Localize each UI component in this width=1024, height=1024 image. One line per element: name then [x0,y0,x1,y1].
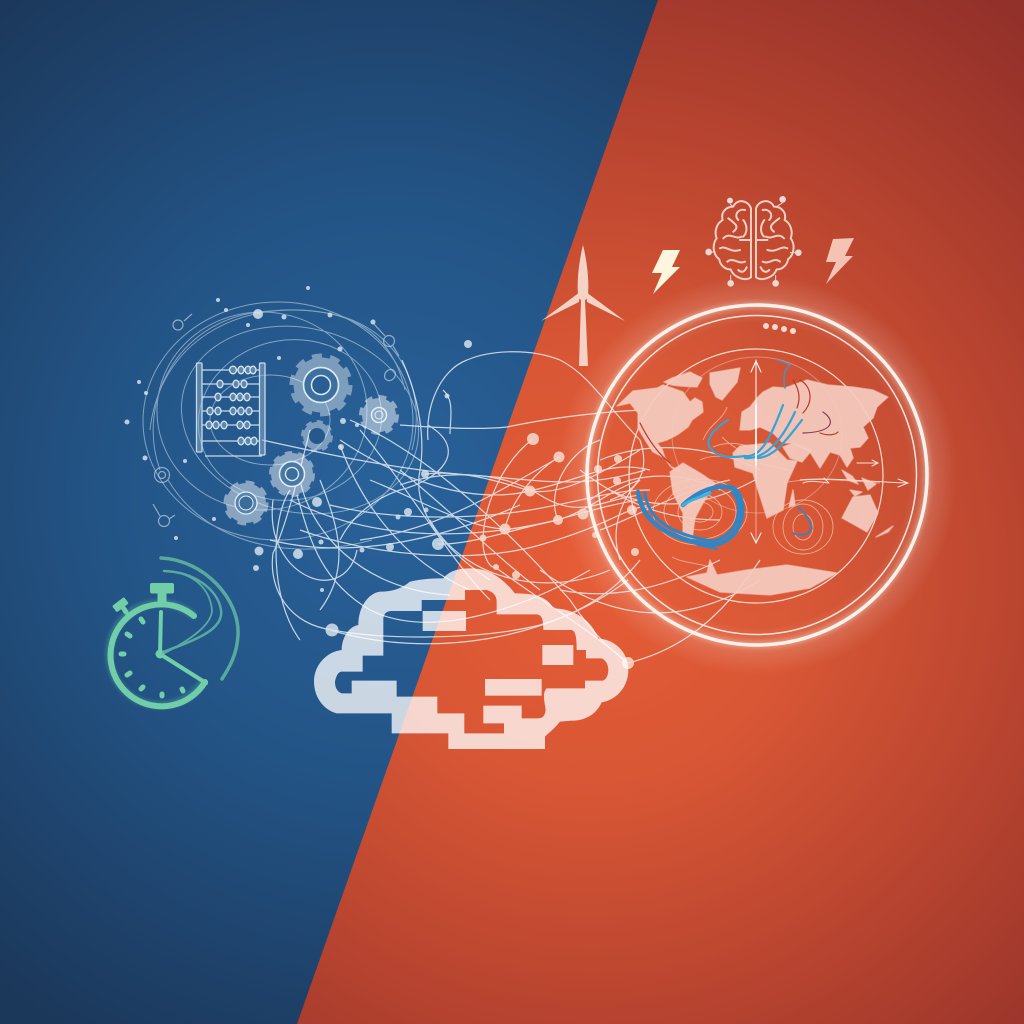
Madagascar [789,490,795,507]
icon: lightning bolt left [652,250,680,294]
icon: wind turbine [541,245,625,366]
New Zealand [876,526,893,537]
network of flowing connection lines across the divide [262,352,760,663]
Arabia [783,443,812,462]
globe outer glow [557,275,957,675]
Antarctica [687,560,837,595]
continents [617,368,893,595]
thin warm current swirls [653,407,880,567]
Central America [665,458,680,471]
icon: right gear [362,398,396,432]
Australia [842,495,878,532]
icon: large gear [293,357,349,413]
vertical axis arrow [751,360,761,543]
blue ocean gyre, South Atlantic [638,487,742,549]
globe top dots [763,323,796,334]
left hemisphere outline [714,201,751,279]
stopwatch glow [109,603,204,705]
Southeast Asian islands [842,470,876,496]
icon: translucent cloud [314,568,628,749]
network nodes [124,286,472,636]
right hemisphere outline [756,201,794,279]
stopwatch body [111,592,206,706]
icon: lightning bolt right [826,238,854,284]
Arctic islands [664,372,702,387]
globe rings [587,305,927,645]
horizontal wind arrows [800,460,908,487]
icon: lower left gear [226,483,266,523]
network nodes on the warm side [480,433,639,669]
cloud data blocks [423,611,573,696]
dark red currents [640,380,838,463]
stopwatch crown and side button [112,583,174,658]
icon: lower center gear [271,453,313,495]
speed trails [161,558,238,679]
stopwatch tick marks [121,619,183,696]
small ring markers around the orbit [153,314,399,526]
icon: brain with nodes [705,196,802,287]
icon: small center gear [303,422,331,450]
world map [617,360,908,595]
background: red diagonal half [297,0,1024,1024]
Africa [733,443,797,518]
South America [670,463,715,540]
blue currents, North Atlantic to Arabia [708,360,812,535]
icon: abacus [196,363,265,456]
North America [617,385,703,458]
icon: stopwatch [109,558,238,706]
Eurasia [740,380,888,468]
network of orbits around the computing cluster [143,302,439,549]
Greenland [710,368,740,400]
brain folds [720,210,751,272]
brain nodes [705,196,802,287]
